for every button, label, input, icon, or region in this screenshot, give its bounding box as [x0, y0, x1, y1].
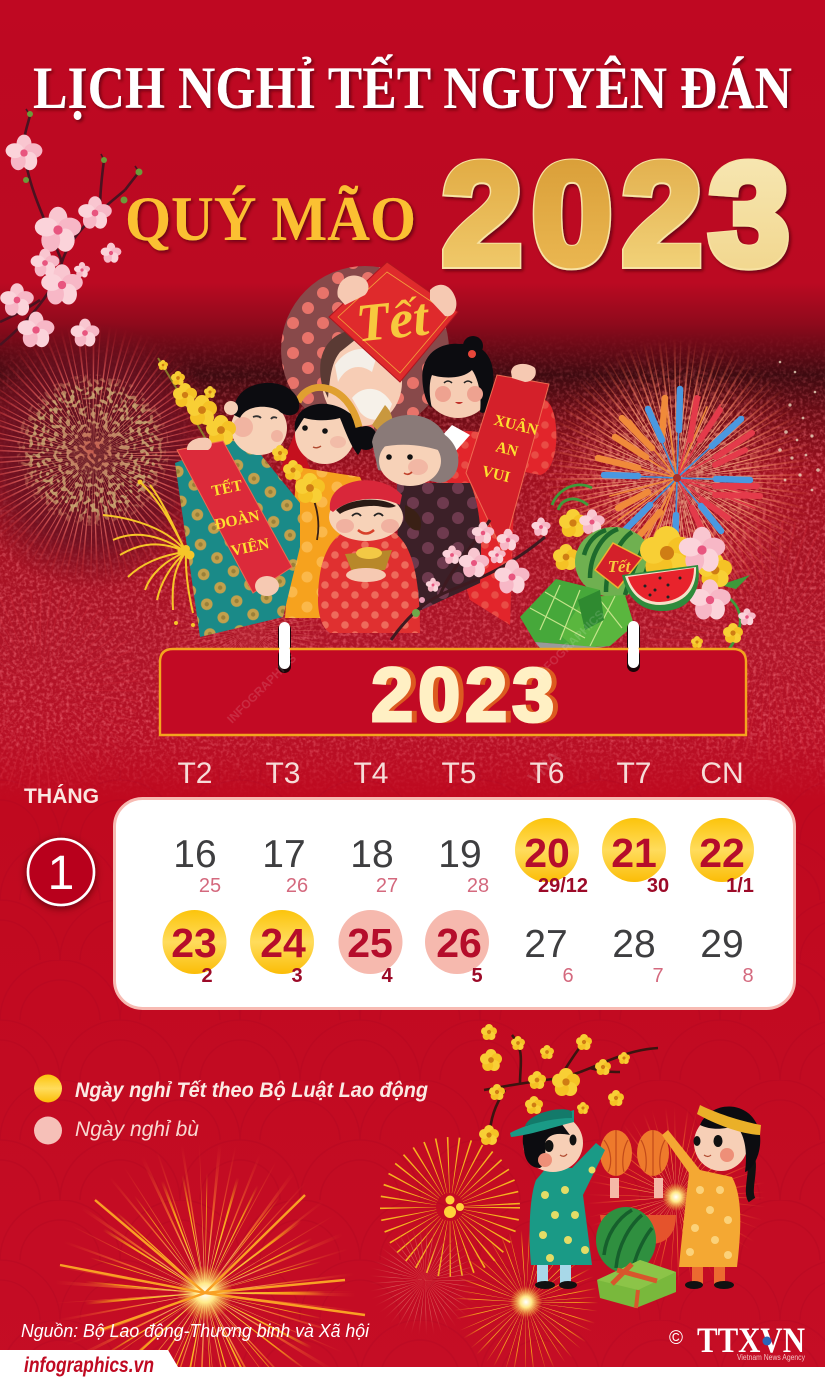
- boy: [510, 1109, 605, 1289]
- footer strip: [0, 1350, 825, 1378]
- lunar dates, holidays: 2: [201, 965, 213, 987]
- legend: compensatory day: [34, 1116, 199, 1144]
- watermarks: VNA: [524, 747, 565, 788]
- footer strip: infographics.vn: [24, 1354, 154, 1377]
- dates, regular: [173, 833, 744, 966]
- background: [0, 286, 825, 790]
- weekday headers: T5: [441, 757, 477, 790]
- lunar dates, regular: 7: [652, 965, 664, 987]
- lunar dates, holidays: 29/12: [538, 875, 588, 897]
- yellow and pink flowers: [640, 526, 732, 620]
- illustration: boy and girl hanging lanterns: [510, 1105, 761, 1308]
- lunar dates, regular: 28: [467, 875, 489, 897]
- dates, holidays: 20: [524, 830, 570, 876]
- Tết Đoàn Viên scroll: ĐOÀN: [213, 507, 261, 534]
- watermelon: [596, 1207, 656, 1273]
- dates, regular: 18: [350, 833, 394, 876]
- banner year text: 2023: [371, 653, 554, 738]
- lanterns: [600, 1130, 669, 1198]
- dark red panel behind woman and man: [280, 430, 314, 480]
- bottom fireworks: [60, 1152, 721, 1368]
- Xuân An Vui scroll: AN: [494, 439, 520, 460]
- grandfather polka-dot sleeve: [281, 266, 449, 434]
- girl with top knot and Xuân An Vui scroll: [422, 336, 556, 625]
- weekday headers: T2: [177, 757, 213, 790]
- firework right: [567, 368, 787, 588]
- Tết Đoàn Viên scroll: [177, 441, 292, 593]
- lunar dates, holidays: 4: [381, 965, 393, 987]
- legend: Tet holiday: Ngày nghỉ Tết theo Bộ Luật Lao động: [75, 1079, 428, 1102]
- dates, regular: 17: [262, 833, 306, 876]
- dates, regular: 29: [700, 923, 744, 966]
- holiday markers: [162, 818, 754, 974]
- watermarks: INFOGRAPHICS: [224, 651, 299, 726]
- month label: [24, 785, 99, 905]
- weekday headers: T4: [353, 757, 389, 790]
- watermarks: INFOGRAPHICS: [532, 607, 607, 682]
- lunar dates, holidays: [201, 875, 754, 987]
- dates, holidays: 23: [171, 920, 217, 966]
- legend: [34, 1074, 428, 1144]
- month label: THÁNG: [24, 785, 99, 808]
- dates, holidays: 26: [436, 920, 482, 966]
- TTXVN logo: TTXVN: [697, 1320, 805, 1360]
- lunar dates, regular: 8: [742, 965, 754, 987]
- Xuân An Vui scroll: VUI: [480, 463, 512, 486]
- dates, regular: 27: [524, 923, 568, 966]
- lunar dates, holidays: 5: [471, 965, 483, 987]
- plum blossom branch, top left: [0, 109, 142, 347]
- sparkler behind children: [631, 1152, 721, 1242]
- child with gold ingot: [318, 480, 420, 633]
- dates, holidays: 24: [260, 920, 306, 966]
- weekday headers: T6: [529, 757, 565, 790]
- big gold year 2023: 2023: [442, 134, 789, 294]
- apricot blossom branch, bottom: [479, 1024, 658, 1145]
- man in teal robe with Tết Đoàn Viên scroll: [158, 358, 325, 637]
- small Tet sign on melon: Tết: [608, 557, 632, 576]
- yellow apricot sprig: [158, 358, 325, 540]
- month number circle: 1: [48, 847, 74, 900]
- dates, holidays: 22: [699, 830, 745, 876]
- dates, regular: 16: [173, 833, 217, 876]
- sparkler small: [490, 1266, 562, 1338]
- watermarks: [224, 607, 607, 788]
- Tet diamond sign: Tết: [353, 286, 433, 354]
- background fireworks: upper band: [0, 320, 825, 740]
- illustration: gold firework left of family: [103, 480, 195, 627]
- lunar dates, holidays: 3: [291, 965, 303, 987]
- Xuân An Vui scroll: [466, 375, 549, 552]
- calendar rings: [278, 621, 640, 673]
- weekday headers: T7: [616, 757, 652, 790]
- dates, regular: 19: [438, 833, 482, 876]
- dates, regular: 28: [612, 923, 656, 966]
- scattered sparks right: [778, 361, 820, 491]
- dates, holidays: 21: [611, 830, 657, 876]
- dates, holidays: [171, 830, 745, 966]
- lunar dates, regular: [199, 875, 754, 987]
- girl: [662, 1105, 761, 1289]
- illustration: blue and orange firework: [598, 387, 760, 552]
- firework left: [0, 320, 228, 590]
- Tet diamond sign: [329, 262, 458, 382]
- gold burst middle: [408, 1165, 492, 1249]
- TTXVN logo: ©: [669, 1328, 683, 1349]
- legend: compensatory day: Ngày nghỉ bù: [75, 1118, 199, 1141]
- banner year text: 2023: [376, 653, 559, 738]
- calendar panel: [114, 798, 794, 1008]
- lunar dates, holidays: 1/1: [726, 875, 754, 897]
- sparkler left: [60, 1195, 365, 1368]
- weekday headers: T3: [265, 757, 301, 790]
- grandmother: [372, 415, 481, 612]
- lunar dates, regular: 6: [562, 965, 574, 987]
- banh chung: [597, 1260, 676, 1308]
- subtitle: Quý Mão: QUÝ MÃO: [125, 183, 416, 254]
- illustration: family holding Tet banners: [158, 262, 556, 640]
- lunar dates, regular: 25: [199, 875, 221, 897]
- illustration: Tet foods, watermelon and banh chung: [520, 485, 756, 682]
- small Tet sign on melon: [595, 543, 642, 588]
- TTXVN logo: Vietnam News Agency: [737, 1353, 805, 1362]
- banh chung: [520, 579, 634, 650]
- peach blossom branch: [391, 517, 551, 640]
- Tết Đoàn Viên scroll: TẾT: [210, 476, 245, 500]
- big gold year 2023: 2023: [442, 134, 789, 295]
- Xuân An Vui scroll: XUÂN: [492, 412, 540, 439]
- source line: Nguồn: Bộ Lao động-Thương binh và Xã hội: [21, 1321, 370, 1341]
- watermelon: [575, 527, 653, 597]
- lunar dates, regular: 26: [286, 875, 308, 897]
- lunar dates, holidays: 30: [647, 875, 669, 897]
- grandfather face: [320, 330, 402, 440]
- slice behind: [600, 1215, 676, 1244]
- Tết Đoàn Viên scroll: VIÊN: [229, 535, 271, 560]
- TTXVN logo: [669, 1320, 805, 1362]
- woman in orange ao dai: [285, 387, 380, 618]
- vine and flowers: [552, 485, 756, 682]
- lunar dates, regular: 27: [376, 875, 398, 897]
- weekday headers: CN: [700, 757, 744, 790]
- weekday headers: [177, 757, 744, 790]
- watermelon slice: [622, 565, 699, 611]
- dates, holidays: 25: [347, 920, 393, 966]
- year banner: [160, 645, 746, 738]
